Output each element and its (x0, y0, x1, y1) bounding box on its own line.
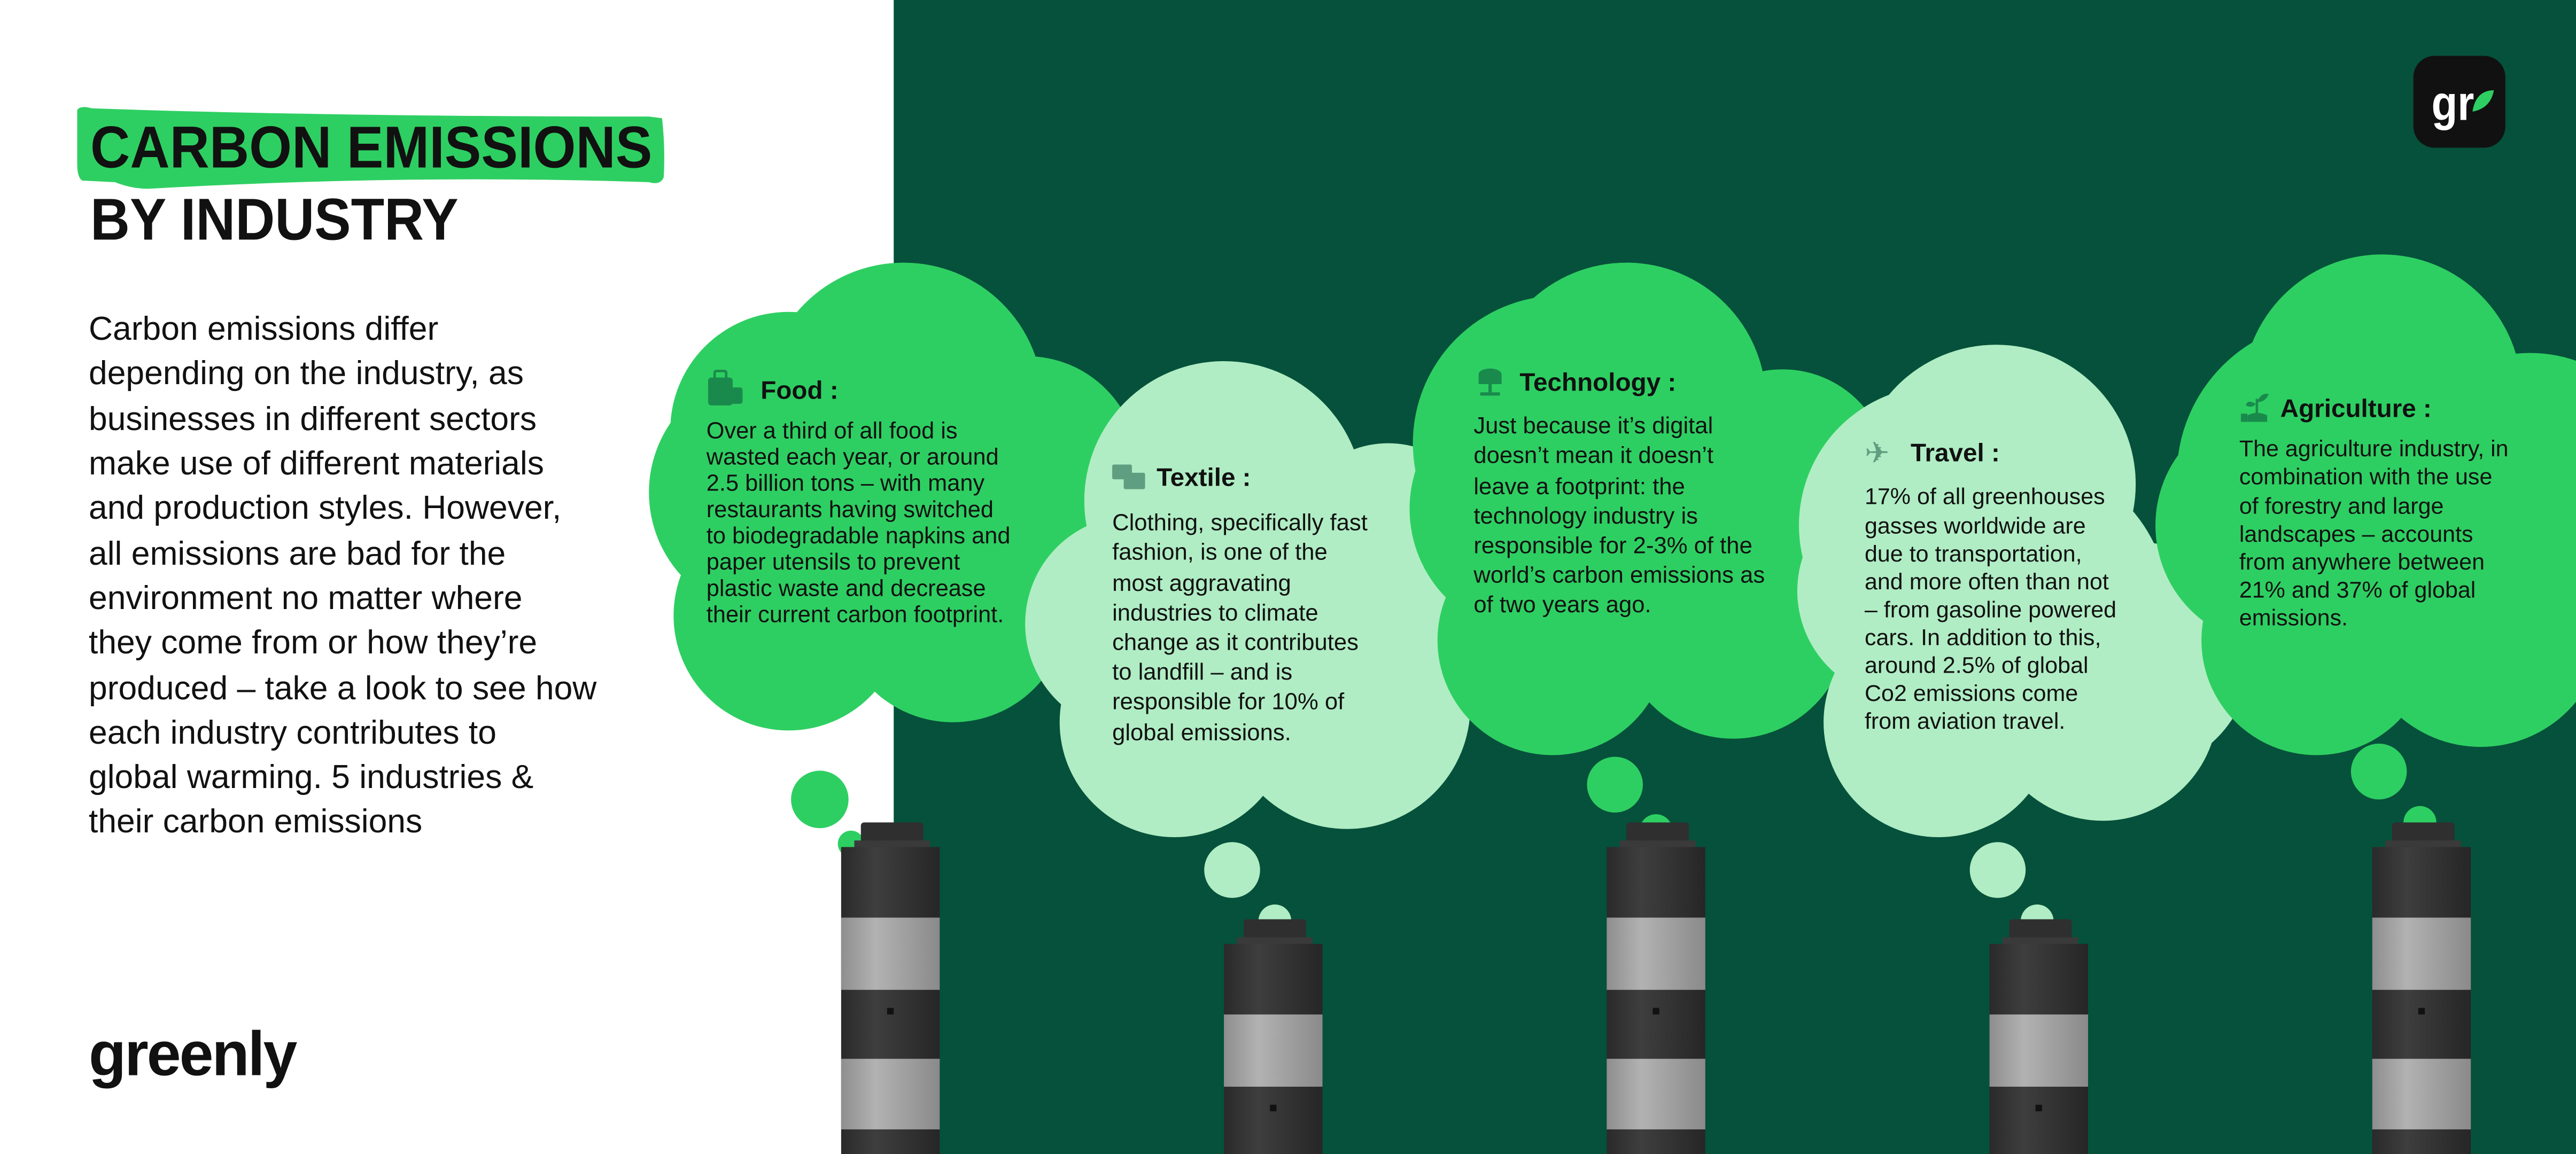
logo: gr app icon (2414, 56, 2505, 148)
text: food: Over a third of all food is (707, 418, 958, 443)
text: food (706, 371, 1010, 627)
text: textile: most aggravating (1112, 570, 1291, 596)
text: textile: fashion, is one of the (1112, 539, 1328, 565)
text: food: their current carbon footprint. (707, 602, 1004, 627)
text: technology: doesn’t mean it doesn’t (1473, 442, 1713, 468)
text: technology: technology industry is (1473, 503, 1698, 529)
bubble: agriculture (2351, 744, 2407, 799)
text: travel: 17% of all greenhouses (1865, 484, 2105, 509)
cloud: agriculture (2155, 254, 2576, 839)
intro text block: they come from or how they’re (89, 624, 537, 661)
text: travel: around 2.5% of global (1865, 653, 2089, 679)
bubble: technology (1587, 757, 1643, 813)
text: agriculture: landscapes – accounts (2239, 521, 2473, 547)
text: textile: Clothing, specifically fast (1112, 509, 1368, 535)
text: food: 2.5 billion tons – with many (707, 471, 984, 496)
text: agriculture: of forestry and large (2239, 494, 2443, 519)
intro text block (89, 310, 597, 840)
text: travel: Co2 emissions come (1865, 681, 2078, 706)
icon: travel plane: ✈ (1865, 436, 1889, 469)
background: dark green panel (894, 0, 2576, 1154)
logo: greenly wordmark: greenly (89, 1019, 297, 1089)
chimney 1 (841, 822, 940, 1154)
text: textile (1112, 463, 1368, 746)
chimney 5 (2372, 822, 2471, 1154)
text: agriculture: The agriculture industry, in (2239, 436, 2509, 462)
text: textile: global emissions. (1112, 720, 1291, 746)
intro text block: make use of different materials (89, 445, 544, 482)
intro text block: produced – take a look to see how (89, 670, 597, 707)
text: food: plastic waste and decrease (707, 575, 986, 601)
cloud: travel (1797, 345, 2251, 937)
text: technology: of two years ago. (1473, 591, 1651, 618)
title: CARBON EMISSIONS (90, 114, 652, 180)
text: textile: change as it contributes (1112, 629, 1359, 656)
logo: gr app icon: gr (2431, 75, 2474, 130)
icon: agriculture hand plant (2241, 394, 2269, 422)
chimney 3 (1607, 822, 1705, 1154)
text: food: to biodegradable napkins and (707, 523, 1010, 549)
cloud: technology (1409, 263, 1889, 847)
title: BY INDUSTRY (90, 187, 459, 253)
text: textile: Textile : (1157, 463, 1251, 492)
text: technology (1473, 368, 1765, 618)
text: technology: leave a footprint: the (1473, 473, 1685, 500)
text: food: restaurants having switched (707, 497, 994, 523)
text: travel: Travel : (1911, 439, 2000, 467)
text: agriculture: combination with the use (2239, 464, 2492, 489)
text: agriculture: emissions. (2239, 605, 2348, 631)
text: agriculture: 21% and 37% of global (2239, 577, 2476, 603)
intro text block: depending on the industry, as (89, 355, 524, 392)
intro text block: Carbon emissions differ (89, 310, 438, 347)
text: textile: responsible for 10% of (1112, 688, 1345, 714)
text: travel: cars. In addition to this, (1865, 625, 2101, 651)
text: technology: Technology : (1519, 368, 1676, 396)
text: travel: gasses worldwide are (1865, 513, 2086, 539)
text: technology: Just because it’s digital (1473, 412, 1713, 439)
intro text block: global warming. 5 industries & (89, 759, 533, 796)
text: technology: world’s carbon emissions as (1473, 562, 1765, 588)
bubble: travel (1970, 842, 2026, 898)
icon: technology (1479, 369, 1502, 395)
icon: food bag (708, 371, 742, 406)
text: travel: – from gasoline powered (1865, 597, 2116, 622)
text: food: paper utensils to prevent (707, 549, 960, 575)
cloud: food (649, 263, 1138, 857)
text: travel: and more often than not (1865, 569, 2109, 595)
intro text block: their carbon emissions (89, 803, 422, 840)
text: textile: to landfill – and is (1112, 659, 1292, 685)
text: agriculture: Agriculture : (2280, 394, 2432, 423)
chimney 4 (1990, 919, 2088, 1154)
text: travel: due to transportation, (1865, 541, 2082, 567)
intro text block: all emissions are bad for the (89, 535, 506, 572)
text: travel: from aviation travel. (1865, 708, 2065, 734)
bubble: textile (1204, 842, 1260, 898)
title (92, 126, 650, 240)
intro text block: and production styles. However, (89, 489, 561, 526)
text: agriculture (2239, 394, 2509, 631)
text: travel (1865, 436, 2116, 734)
text: textile: industries to climate (1112, 599, 1318, 626)
text: food: Food : (761, 377, 839, 405)
intro text block: each industry contributes to (89, 714, 496, 751)
text: food: wasted each year, or around (706, 445, 999, 470)
icon: textile (1112, 465, 1145, 489)
chimney 2 (1224, 919, 1323, 1154)
cloud: textile (1025, 361, 1487, 937)
intro text block: environment no matter where (89, 580, 522, 617)
intro text block: businesses in different sectors (89, 401, 537, 438)
text: technology: responsible for 2-3% of the (1473, 532, 1752, 558)
title highlight (77, 107, 664, 189)
bubble: food (791, 771, 849, 828)
text: agriculture: from anywhere between (2239, 549, 2485, 575)
